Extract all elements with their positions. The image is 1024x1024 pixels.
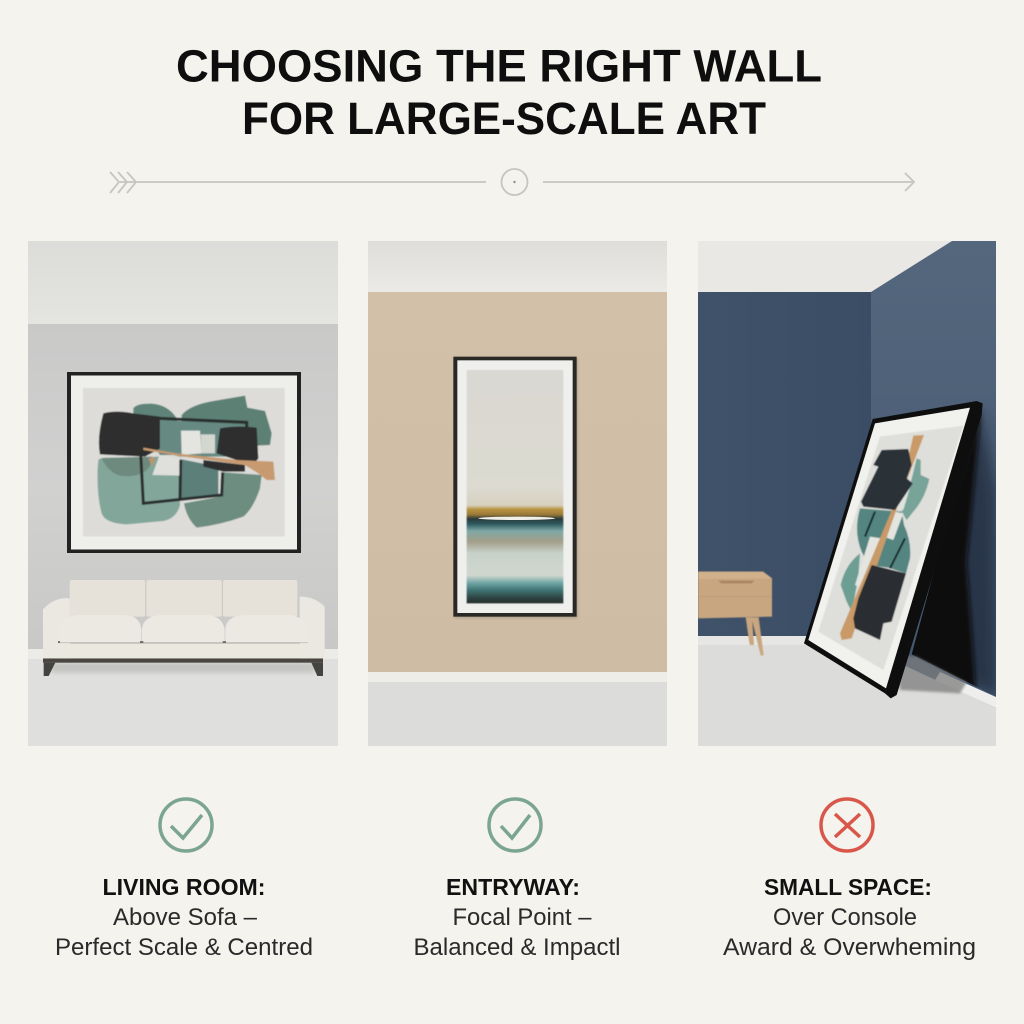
entryway text: ENTRYWAY:: [446, 874, 580, 900]
living room text: Above Sofa –: [113, 904, 258, 931]
icon: green check: [489, 799, 541, 851]
sofa: [43, 580, 325, 676]
leaning framed art: [804, 401, 983, 698]
small space text: Over Console: [773, 904, 917, 931]
framed tall landscape art: [453, 357, 578, 618]
column: entryway caption: [414, 799, 620, 961]
living room text: LIVING ROOM:: [102, 874, 266, 900]
panel: living room: [28, 241, 338, 746]
entryway text: Focal Point –: [452, 904, 592, 931]
title: [176, 40, 822, 144]
panel: small space: [698, 241, 997, 746]
baseboard on right wall: [935, 672, 996, 708]
icon: green check: [160, 799, 212, 851]
title: CHOOSING THE RIGHT WALL: [176, 40, 822, 92]
small space text: SMALL SPACE:: [764, 874, 932, 900]
column: small space caption: [723, 799, 976, 961]
small space text: [723, 874, 976, 961]
panel: entryway: [368, 241, 667, 746]
console table: [698, 572, 772, 655]
icon: red cross: [821, 799, 873, 851]
divider with arrows and centre dot: [110, 169, 914, 195]
title: FOR LARGE-SCALE ART: [242, 93, 766, 144]
entryway text: Balanced & Impactl: [414, 934, 620, 961]
living room text: Perfect Scale & Centred: [55, 934, 313, 961]
small space text: Award & Overwheming: [723, 934, 976, 961]
shadow behind leaning frame: [897, 408, 997, 698]
column: living room caption: [55, 799, 313, 961]
living room text: [55, 874, 313, 961]
entryway text: [414, 874, 620, 961]
framed abstract art above sofa: [67, 372, 301, 553]
